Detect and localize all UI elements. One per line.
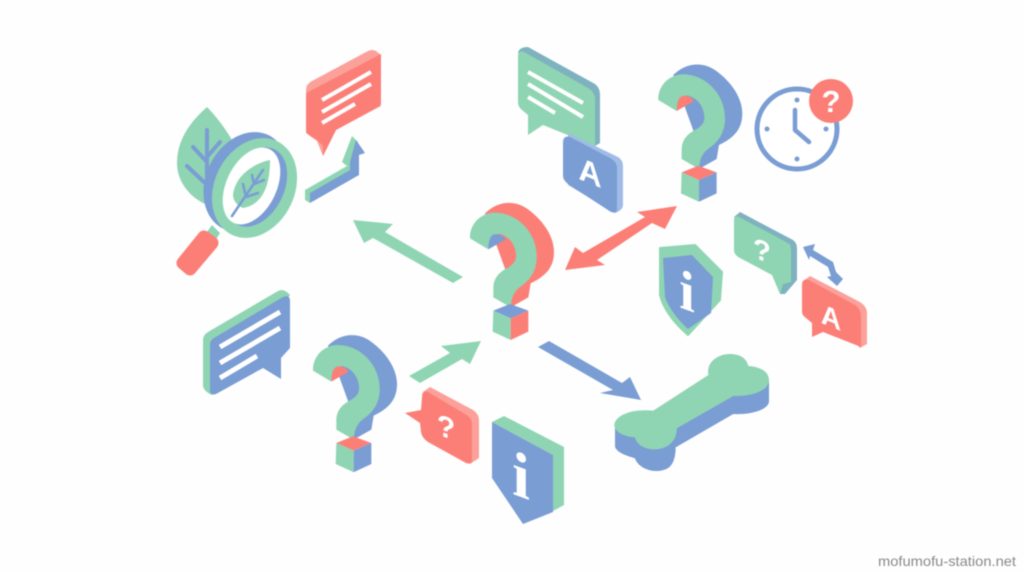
icon: red speech bubble with lines (306, 50, 381, 156)
arrow: bent up arrow (305, 136, 365, 203)
letter A: A (821, 299, 841, 338)
icon: top right question mark (658, 65, 742, 202)
icon: red question bubble (405, 387, 479, 464)
icon: leaf under magnifying glass (177, 107, 232, 204)
arrow: blue pointing down-right (538, 341, 641, 400)
letter A: A (578, 151, 602, 196)
icon: red letter A bubble (802, 276, 867, 348)
watermark: mofumofu-station.net (878, 553, 1016, 569)
icon: central question mark (470, 203, 554, 340)
bubble question mark: ? (437, 407, 455, 447)
badge question mark: ? (822, 84, 840, 119)
icon: isometric bone (614, 354, 769, 471)
icon: shield with info (660, 245, 722, 335)
icon: blue speech bubble with lines (203, 290, 290, 395)
arrow: green pointing up-left (353, 220, 463, 283)
icon: magnifying glass (183, 118, 313, 269)
arrow: green pointing up-right (409, 341, 481, 383)
icon: blue letter A block (563, 133, 623, 213)
bubble question mark: ? (753, 232, 771, 270)
arrow: red double-headed (565, 206, 677, 270)
arrow: small blue double arrow (803, 244, 843, 286)
icon: lower left question mark (313, 335, 397, 472)
icon: clock with question badge (757, 79, 853, 169)
tag letter i: i (512, 438, 530, 515)
icon: green question bubble (734, 212, 797, 294)
icon: blue info tag (492, 416, 564, 524)
shield letter i: i (679, 257, 695, 325)
icon: green speech bubble with lines (518, 47, 600, 146)
